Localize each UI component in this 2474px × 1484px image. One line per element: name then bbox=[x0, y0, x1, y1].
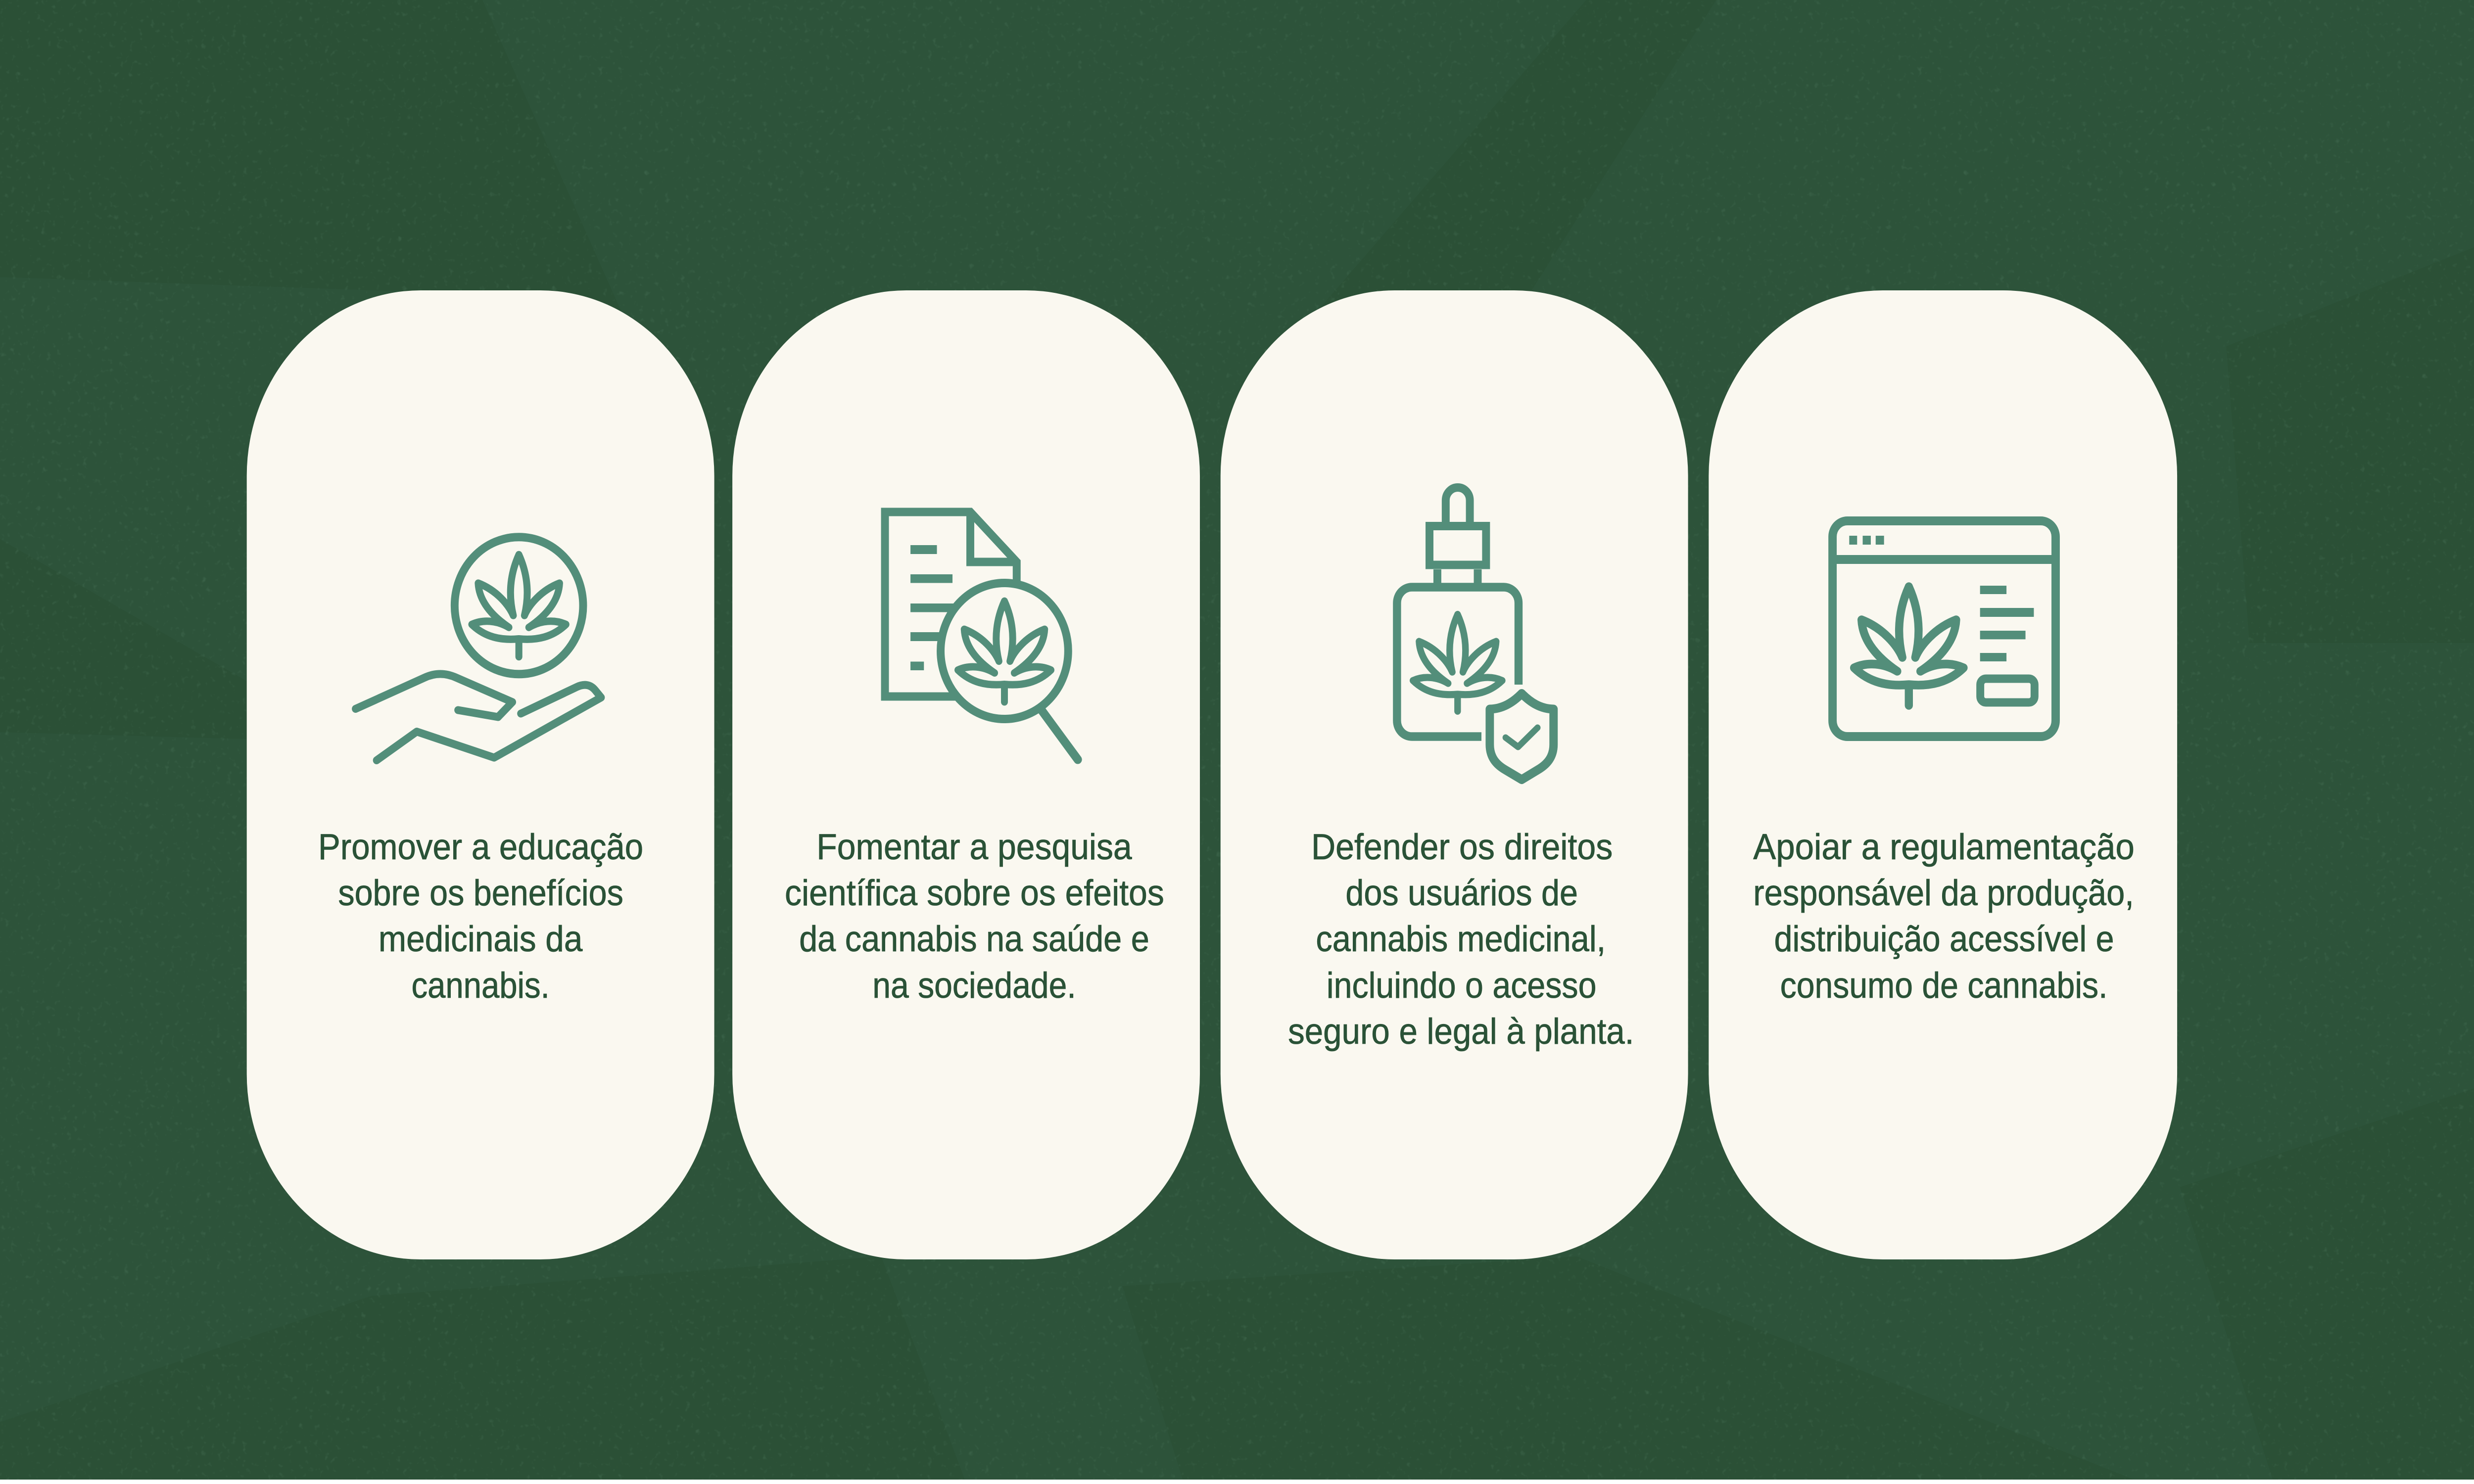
text: defend rights: dos usuários de bbox=[1345, 873, 1578, 913]
text: promote education bbox=[318, 827, 643, 1005]
icon: hand holding cannabis leaf bbox=[356, 537, 601, 760]
text: support regulation: responsável da produção, bbox=[1753, 873, 2134, 913]
text: defend rights bbox=[1288, 827, 1634, 1051]
text: foster research: da cannabis na saúde e bbox=[799, 919, 1149, 959]
text: support regulation: distribuição acessível e bbox=[1774, 919, 2114, 959]
text: promote education: sobre os benefícios bbox=[338, 873, 623, 913]
text: foster research: científica sobre os efeitos bbox=[785, 873, 1164, 913]
text: foster research: Fomentar a pesquisa bbox=[816, 827, 1132, 867]
text: support regulation bbox=[1753, 827, 2135, 1005]
text: defend rights: cannabis medicinal, bbox=[1316, 919, 1606, 959]
text: promote education: Promover a educação bbox=[318, 827, 643, 867]
text: defend rights: seguro e legal à planta. bbox=[1288, 1011, 1634, 1051]
panel: support regulation bbox=[1709, 290, 2177, 1259]
panel: foster research bbox=[732, 290, 1200, 1259]
text: support regulation: consumo de cannabis. bbox=[1780, 965, 2107, 1005]
text: promote education: medicinais da bbox=[379, 919, 583, 959]
icon: browser window with leaf bbox=[1833, 521, 2055, 737]
text: defend rights: Defender os direitos bbox=[1311, 827, 1613, 867]
text: promote education: cannabis. bbox=[411, 965, 550, 1005]
panel: defend rights bbox=[1221, 290, 1688, 1259]
text: foster research: na sociedade. bbox=[872, 965, 1076, 1005]
panel: promote education bbox=[247, 290, 714, 1259]
icon: document with magnifying glass and leaf bbox=[885, 512, 1078, 760]
text: foster research bbox=[785, 827, 1164, 1005]
text: support regulation: Apoiar a regulamentação bbox=[1753, 827, 2135, 867]
text: defend rights: incluindo o acesso bbox=[1327, 965, 1596, 1005]
icon: dropper bottle with leaf and shield bbox=[1397, 488, 1554, 780]
